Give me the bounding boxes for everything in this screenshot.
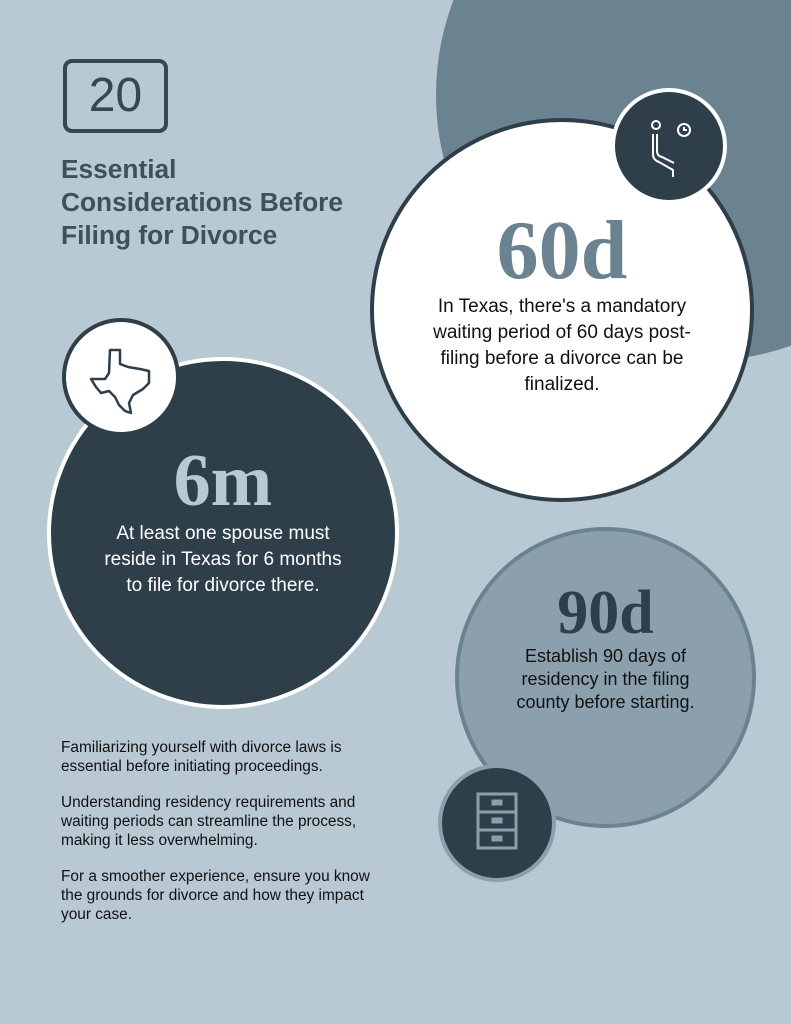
panel: 60d: [370, 118, 754, 502]
text block: Familiarizing yourself with divorce laws is essential before initiating proceedings.: [61, 739, 342, 775]
panel: 6m: [47, 357, 399, 709]
title: Essential: [61, 154, 176, 184]
text block: Understanding residency requirements and waiting periods can streamline the process, making it less overwhelming.: [61, 794, 356, 849]
stat 6m: 6m: [174, 440, 272, 522]
number badge: [63, 59, 168, 133]
text 60d: In Texas, there's a mandatory waiting period of 60 days post-filing before a divorce can be finalized.: [433, 296, 691, 395]
icon: texas: [62, 318, 180, 436]
title: Considerations Before: [61, 187, 343, 217]
text 90d: Establish 90 days of residency in the filing county before starting.: [516, 646, 695, 712]
number badge: 20: [89, 69, 142, 122]
icon: waiting clock: [611, 88, 727, 204]
panel: 90d: [455, 527, 756, 828]
icon: cabinet: [438, 764, 556, 882]
text 6m: At least one spouse must reside in Texas for 6 months to file for divorce there.: [104, 523, 342, 596]
text block: For a smoother experience, ensure you know the grounds for divorce and how they impact your case.: [61, 868, 370, 923]
title: [61, 154, 343, 250]
title: Filing for Divorce: [61, 220, 277, 250]
text block: [61, 739, 370, 923]
stat 60d: 60d: [497, 204, 627, 297]
stat 90d: 90d: [557, 579, 654, 647]
